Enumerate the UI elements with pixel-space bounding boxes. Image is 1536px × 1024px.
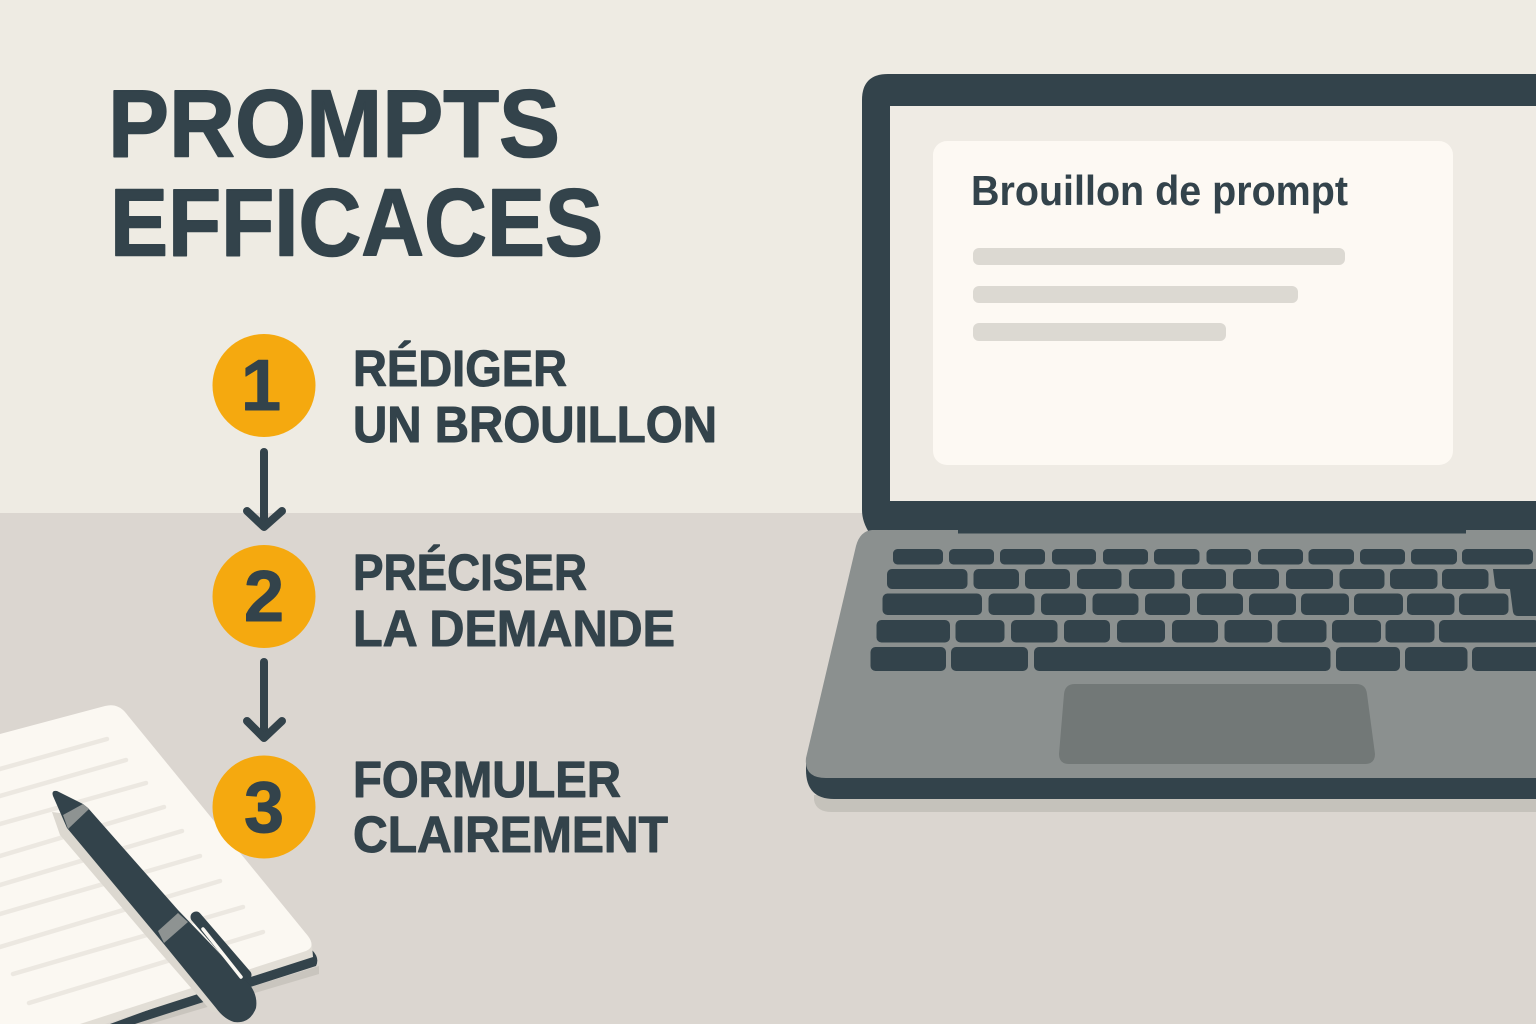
step 3 label: [353, 751, 668, 863]
arrow 1 to 2: [247, 452, 282, 527]
laptop: [806, 74, 1536, 812]
background wall: [0, 0, 1536, 513]
title: PROMPTS: [108, 70, 560, 178]
step 1 label: [353, 340, 717, 453]
pen shadow: [52, 812, 240, 1012]
title: EFFICACES: [110, 170, 603, 276]
step 3: [212, 751, 668, 863]
step 1 number: 1: [241, 346, 281, 426]
card heading: Brouillon de prompt: [971, 167, 1348, 214]
card placeholder lines: [973, 248, 1345, 341]
title: [108, 70, 603, 276]
step 3 badge: [212, 756, 316, 858]
step 3 label: CLAIREMENT: [353, 806, 668, 863]
touchpad: [1059, 684, 1375, 764]
notebook page edge: [75, 945, 313, 1024]
pen clip: [196, 917, 246, 975]
step 2 label: LA DEMANDE: [353, 600, 675, 657]
step 2 badge: [212, 545, 316, 648]
step 1 label: UN BROUILLON: [353, 396, 717, 453]
pen: [52, 791, 256, 1022]
notebook shadow: [130, 966, 319, 1024]
step 3 number: 3: [244, 768, 284, 848]
step 1 badge: [212, 334, 316, 437]
keyboard: [870, 549, 1536, 671]
step 2: [212, 544, 675, 657]
laptop screen: [890, 106, 1536, 501]
step 1 label: RÉDIGER: [353, 340, 567, 397]
screen card: [933, 141, 1453, 465]
step 2 label: PRÉCISER: [353, 544, 587, 601]
pen clip highlight: [203, 929, 241, 977]
step 1: [212, 334, 717, 453]
step 2 label: [353, 544, 675, 657]
notebook cover: [110, 950, 317, 1024]
step 3 label: FORMULER: [353, 751, 621, 808]
arrow 2 to 3: [247, 662, 282, 738]
notebook text lines: [0, 739, 263, 1003]
pen body: [52, 791, 256, 1022]
laptop lid: [862, 74, 1536, 534]
step 2 number: 2: [244, 557, 284, 637]
pen ring bottom: [158, 913, 188, 943]
laptop shadow: [814, 790, 1536, 812]
laptop deck: [806, 530, 1536, 778]
notebook: [0, 705, 319, 1024]
notebook page: [0, 705, 312, 1024]
pen ring top: [63, 804, 89, 829]
laptop base: [806, 760, 1536, 799]
background table: [0, 513, 1536, 1024]
